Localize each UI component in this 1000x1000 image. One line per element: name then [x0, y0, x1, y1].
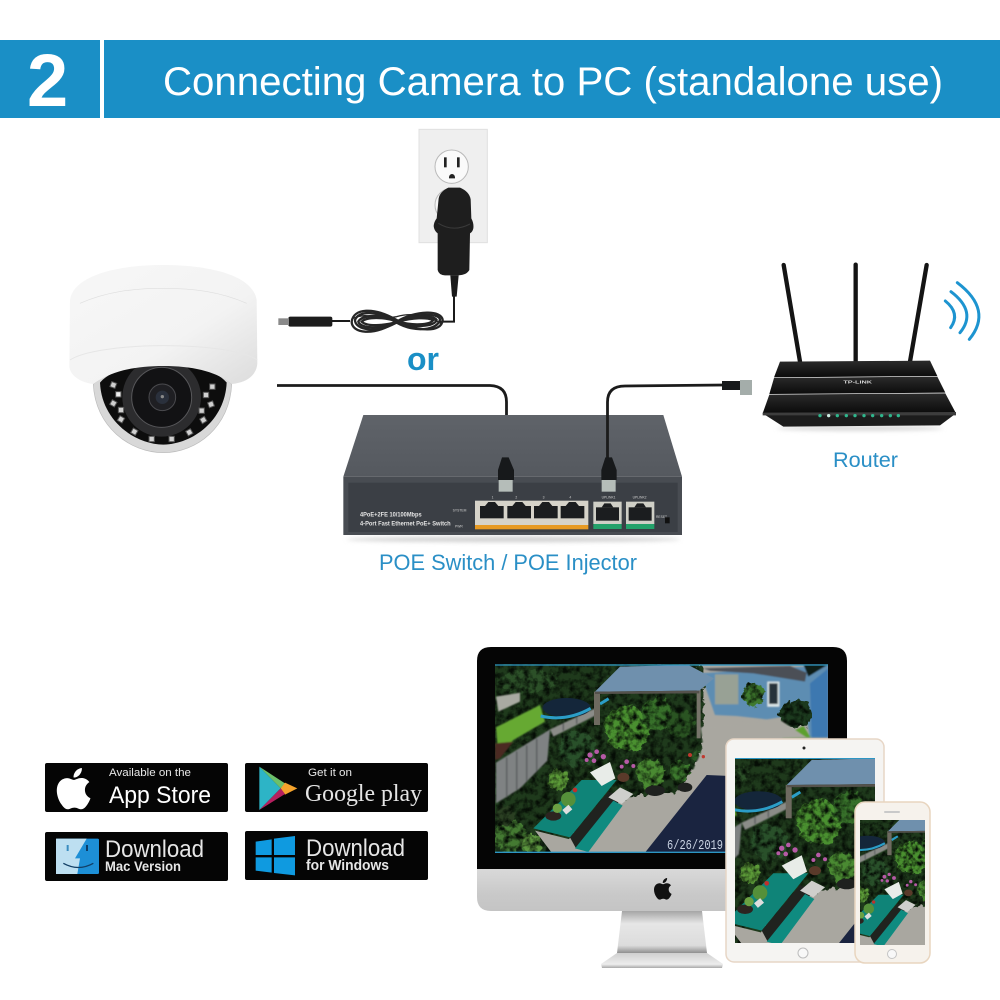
iPad screen image	[735, 758, 875, 943]
screen image	[490, 660, 828, 857]
PoE port block	[475, 501, 588, 529]
step number: 2	[27, 39, 68, 122]
indicator labels: UPLINK2	[633, 496, 647, 500]
top face	[343, 415, 682, 477]
indicator labels: RESET	[656, 515, 667, 519]
badge: Google Play	[245, 763, 428, 812]
indicator labels: UPLINK1	[602, 496, 616, 500]
router body	[763, 361, 956, 427]
icon: router	[763, 265, 956, 431]
cable coil	[352, 311, 443, 332]
white body	[69, 265, 257, 384]
dome housing	[93, 365, 232, 453]
brand: TP-LINK	[843, 380, 873, 386]
badge: Download Windows	[245, 831, 428, 880]
icon: dome camera	[69, 265, 257, 453]
antennas	[784, 265, 927, 365]
connector: camera cable plug	[498, 457, 514, 492]
icon: wall outlet and power adapter	[278, 129, 487, 332]
badge: App Store: App Store	[109, 782, 211, 809]
indicator labels: SYSTEM	[453, 509, 467, 513]
POE label: POE Switch / POE Injector	[379, 550, 637, 575]
connector: switch plug	[601, 457, 617, 492]
switch text: 4PoE+2FE 10/100Mbps	[360, 512, 422, 519]
badge: App Store	[45, 763, 228, 812]
title: Connecting Camera to PC (standalone use)	[163, 60, 943, 104]
wall plate	[419, 129, 487, 243]
front face	[343, 477, 682, 535]
or label: or	[407, 341, 439, 377]
badge: Download Windows: Download	[306, 835, 405, 862]
icon: wifi waves	[945, 283, 979, 339]
iPhone screen image	[860, 820, 925, 945]
POE switch	[343, 415, 682, 542]
badge: Download Mac: Mac Version	[105, 859, 181, 874]
status LEDs	[818, 414, 900, 417]
badge: App Store: Available on the	[109, 767, 191, 779]
icon: windows	[256, 836, 295, 875]
power adapter	[434, 188, 473, 275]
upper socket	[435, 150, 468, 183]
router label: Router	[833, 449, 898, 472]
indicator labels: PWR	[455, 525, 463, 529]
badge: Download Windows: for Windows	[306, 858, 389, 874]
barrel plug	[278, 317, 332, 327]
silver chin	[477, 869, 847, 911]
uplink port 2	[626, 502, 654, 529]
icon: play triangle	[259, 767, 297, 810]
badge: Download Mac	[45, 832, 228, 881]
black bezel	[477, 647, 847, 869]
switch text	[360, 512, 451, 528]
lens	[122, 358, 201, 437]
camera network cable	[277, 386, 506, 460]
connector: router plug	[722, 380, 752, 395]
apple logo	[654, 878, 672, 900]
badge: Google Play: Google play	[305, 781, 422, 807]
timestamp: 6/26/2019	[667, 838, 723, 854]
indicator labels: 2	[515, 496, 517, 500]
indicator labels: 1	[492, 496, 494, 500]
badge: Download Mac: Download	[105, 836, 204, 863]
stand	[601, 911, 723, 968]
header bar	[0, 39, 1000, 122]
icon: finder	[56, 839, 99, 874]
iPad	[725, 738, 885, 963]
iPhone	[854, 801, 931, 964]
uplink port 1	[593, 502, 622, 529]
iMac monitor	[477, 647, 847, 968]
indicator labels	[453, 496, 667, 529]
indicator labels: 3	[543, 496, 545, 500]
badge: Google Play: Get it on	[308, 767, 352, 779]
IR LEDs	[110, 382, 215, 442]
switch text: 4-Port Fast Ethernet PoE+ Switch	[360, 521, 451, 528]
indicator labels: 4	[569, 496, 571, 500]
power cable	[450, 275, 459, 297]
icon: apple	[57, 768, 90, 809]
router uplink cable	[601, 380, 752, 492]
